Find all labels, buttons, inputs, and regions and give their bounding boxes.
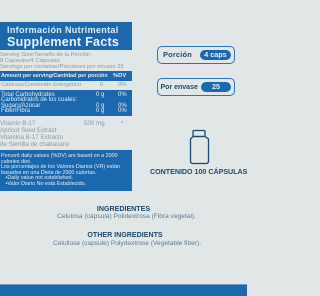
footnote text: calories diet.: [1, 159, 31, 165]
footnote text: •Valor Diario No está Establecido.: [5, 181, 86, 187]
carbohydrate labels: [1, 92, 77, 114]
contenido 100 cápsulas caption: CONTENIDO 100 CÁPSULAS: [150, 168, 247, 176]
footnote text: Los porcentajes de los Valores Diarios (VR) están: [1, 164, 120, 170]
amount per serving label: Amount per serving/Cantidad per porción: [1, 73, 108, 79]
por envase label: Por envase: [160, 84, 198, 90]
vitamin percent: *: [121, 120, 123, 126]
vitamin B-17 block: [0, 120, 124, 148]
percent DV label: %DV: [113, 73, 126, 79]
footer band: [0, 284, 247, 296]
panel: porción badge: [157, 46, 235, 64]
vitamin labels: [0, 120, 70, 148]
vitamin labels: de Semilla de chabacano: [0, 141, 70, 148]
serving size text: 8 Capsules/4 Cápsulas: [0, 58, 60, 64]
carbohydrate percents: 0%: [118, 108, 127, 114]
serving size text: [0, 52, 124, 70]
ingredientes text: Celulosa (cápsula) Polidextrosa (Fibra vegetal).: [57, 213, 196, 220]
icon: bottle: [190, 130, 210, 164]
calories label: Calorías/Contenido Energético: [1, 82, 81, 88]
carbohydrate amounts: 0 g: [96, 108, 104, 114]
carbohydrate labels: Sugars/Azúcar: [1, 103, 40, 109]
heading: Información Nutrimental: Información Nutrimental: [7, 25, 119, 35]
heading: other ingredients: OTHER INGREDIENTS: [87, 231, 163, 239]
vitamin labels: Vitamina B-17 Extracto: [0, 134, 63, 141]
4 caps value pill: 4 caps: [204, 50, 227, 59]
other ingredients text: Celullose (capsule) Polydextrose (Vegetable fiber).: [53, 240, 201, 247]
serving size text: Serving Size/Tamaño de la Porción:: [0, 52, 92, 58]
vitamin labels: Apricot Seed Extract: [0, 127, 56, 134]
carbohydrate percents: [118, 92, 127, 114]
carbohydrate amounts: 0 g: [96, 92, 104, 98]
calories row: [1, 82, 127, 88]
25 value pill: [201, 82, 231, 92]
heading: ingredientes: INGREDIENTES: [97, 205, 150, 213]
carbohydrate amounts: [96, 92, 104, 114]
carbohydrate percents: 0%: [118, 103, 127, 109]
carbohydrates block: [0, 90, 132, 116]
carbohydrate amounts: 0 g: [96, 103, 104, 109]
footnote text: Percent daily values (%DV) are based on a 2000: [1, 153, 118, 159]
calories value: 0: [100, 82, 103, 88]
column header row: [0, 71, 132, 81]
carbohydrate percents: 0%: [118, 92, 127, 98]
footnote text: basados en una Dieta de 2000 calorías.: [1, 170, 96, 176]
panel: por envase badge: [157, 78, 235, 96]
calories percent: 0%: [118, 82, 127, 88]
carbohydrate labels: Fiber/Fibra: [1, 108, 30, 114]
carbohydrate labels: Carbohidratos de los cuales:: [1, 97, 77, 103]
carbohydrate labels: Total Carbohydrates: [1, 92, 55, 98]
4 caps value pill: [200, 50, 231, 60]
25 value pill: 25: [212, 82, 220, 91]
footnote block: [0, 150, 132, 191]
serving size text: Servings per container/Porciones por envase 25: [0, 64, 124, 70]
vitamin amount: 500 mg: [84, 120, 105, 126]
vitamin labels: Vitamin B-17: [0, 120, 35, 126]
table header band: [0, 22, 132, 50]
porción label: Porción: [163, 50, 192, 59]
footnote text: [1, 153, 120, 187]
panel: nutrition facts table: [0, 22, 132, 192]
heading: Supplement Facts: Supplement Facts: [7, 35, 119, 49]
footnote text: •Daily value not established.: [5, 175, 73, 181]
